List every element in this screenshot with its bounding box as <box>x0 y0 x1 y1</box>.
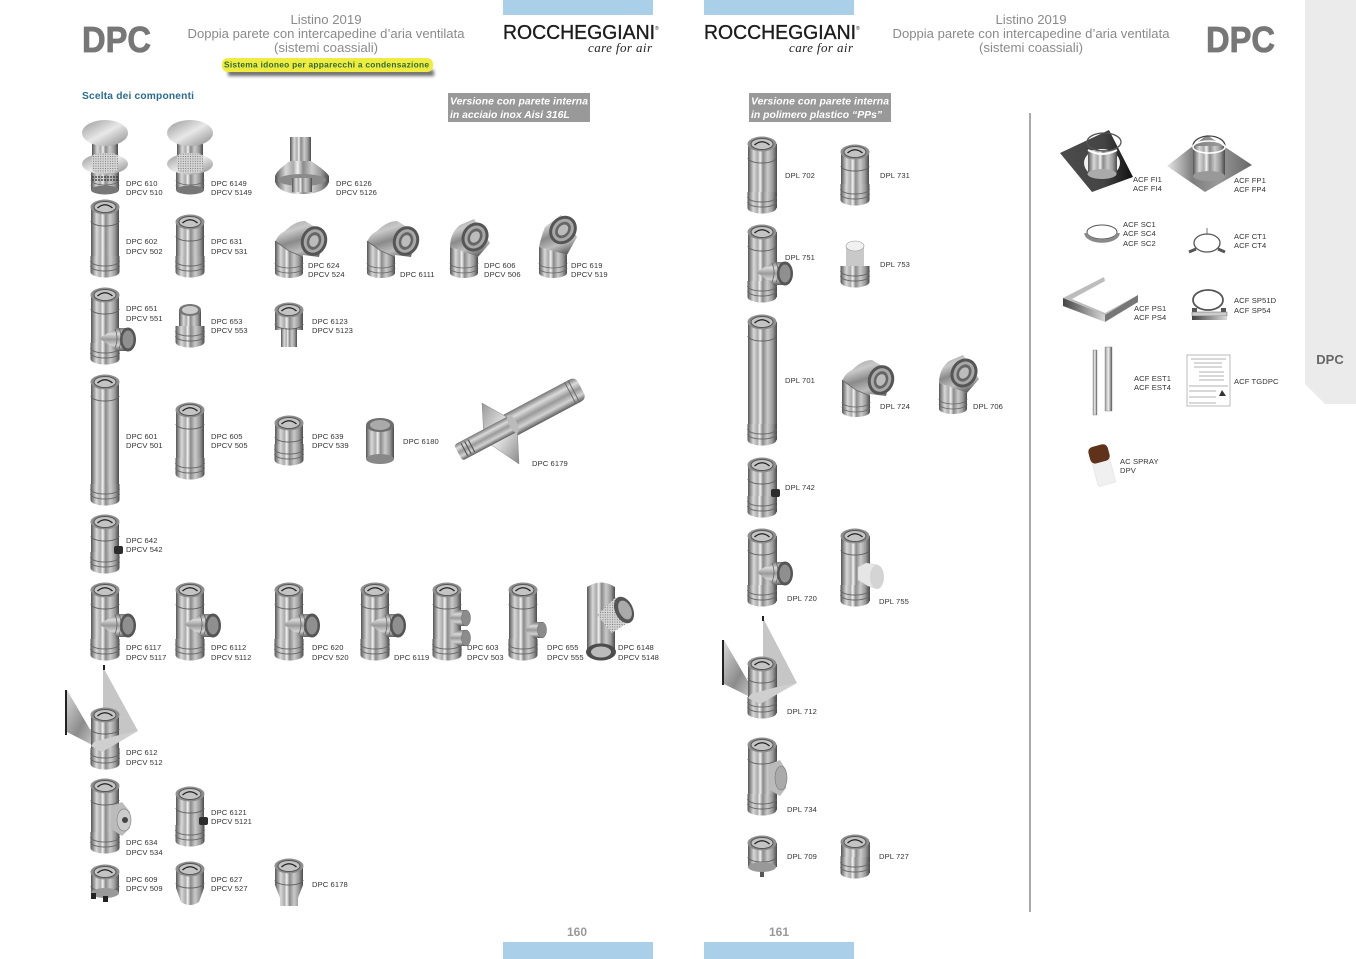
ACF SP: ACF SP51D <box>1234 296 1277 305</box>
bottom blue bar left <box>503 942 653 959</box>
DPC 653 <box>176 304 248 348</box>
DPC 651: DPCV 551 <box>126 314 163 323</box>
DPC 620 <box>274 582 349 662</box>
DPL 706: DPL 706 <box>973 402 1003 411</box>
DPC 6117: DPCV 5117 <box>126 653 166 662</box>
ACF SC: ACF SC4 <box>1123 229 1156 238</box>
AC SPRAY <box>1087 443 1159 487</box>
ACF EST: ACF EST4 <box>1134 383 1171 392</box>
condensing badge: Sistema idoneo per apparecchi a condensazione <box>224 60 429 70</box>
bottom blue bar right <box>704 942 854 959</box>
DPL 731 <box>840 144 910 206</box>
DPC 6126: DPCV 5126 <box>336 188 377 197</box>
DPC 605 <box>176 402 248 480</box>
DPL 753 <box>840 241 910 288</box>
DPC 602: DPCV 502 <box>126 247 163 256</box>
DPC 6121 <box>176 786 252 846</box>
DPC 6123 <box>274 302 353 347</box>
ACF TGDPC <box>1187 355 1279 406</box>
ACF TGDPC: ACF TGDPC <box>1234 377 1279 386</box>
DPC 6119 <box>360 582 429 662</box>
DPL 742 <box>748 458 815 518</box>
DPC 6119: DPC 6119 <box>394 653 429 662</box>
DPC 653: DPCV 553 <box>211 326 248 335</box>
side tab label: DPC <box>1316 352 1344 367</box>
DPC 6178: DPC 6178 <box>312 880 348 889</box>
DPC 6149: DPC 6149 <box>211 179 247 188</box>
DPL 751: DPL 751 <box>785 253 815 262</box>
ACF FI: ACF FI4 <box>1133 184 1162 193</box>
DPL 724 <box>842 360 910 417</box>
DPC 631 <box>176 214 248 278</box>
DPC 6179: DPC 6179 <box>532 459 568 468</box>
DPC 620: DPC 620 <box>312 643 344 652</box>
header title left: Doppia parete con intercapedine d’aria ventilata <box>188 26 465 41</box>
logo right: ® <box>856 25 860 32</box>
DPC 634 <box>90 778 163 857</box>
DPC 606: DPC 606 <box>484 261 516 270</box>
ACF CT: ACF CT1 <box>1234 232 1266 241</box>
DPC 610: DPC 610 <box>126 179 158 188</box>
DPC 603: DPC 603 <box>467 643 499 652</box>
DPC 602 <box>90 200 163 278</box>
DPC 624 <box>275 221 345 279</box>
version box steel: in acciaio inox Aisi 316L <box>450 110 570 121</box>
DPL 706 <box>939 354 1003 414</box>
DPC 612 <box>65 665 163 770</box>
DPC 6112: DPCV 5112 <box>211 653 251 662</box>
header title left: Listino 2019 <box>290 12 362 27</box>
version box steel <box>448 93 590 122</box>
DPC 610 <box>82 120 163 197</box>
DPC 655: DPCV 555 <box>547 653 584 662</box>
ACF FI: ACF FI1 <box>1133 175 1162 184</box>
DPC 6123: DPCV 5123 <box>312 326 353 335</box>
DPL 755: DPL 755 <box>879 597 909 606</box>
DPC 6112: DPC 6112 <box>211 643 246 652</box>
ACF FP: ACF FP1 <box>1234 176 1266 185</box>
page number 161: 161 <box>769 925 789 939</box>
header title right <box>892 12 1170 55</box>
DPC 6126 <box>275 137 377 197</box>
DPC 601 <box>90 374 163 506</box>
DPC 6148: DPCV 5148 <box>618 653 659 662</box>
DPL 701: DPL 701 <box>785 376 815 385</box>
ACF SC <box>1086 220 1156 248</box>
DPC 606: DPCV 506 <box>484 270 521 279</box>
DPL 727: DPL 727 <box>879 852 909 861</box>
DPC 605: DPCV 505 <box>211 441 248 450</box>
DPC 601: DPC 601 <box>126 432 158 441</box>
DPC 601: DPCV 501 <box>126 441 163 450</box>
logo left: ® <box>655 25 659 32</box>
ACF SC: ACF SC2 <box>1123 239 1156 248</box>
side tab <box>1305 0 1356 404</box>
DPC 6179 <box>453 377 587 468</box>
DPL 709: DPL 709 <box>787 852 817 861</box>
DPC 609: DPCV 509 <box>126 884 163 893</box>
DPC 651: DPC 651 <box>126 304 158 313</box>
version box plastic: Versione con parete interna <box>751 96 889 108</box>
DPC 6123: DPC 6123 <box>312 317 348 326</box>
DPC 606 <box>450 218 521 279</box>
ACF SC: ACF SC1 <box>1123 220 1156 229</box>
AC SPRAY: AC SPRAY <box>1120 457 1159 466</box>
DPC 6149 <box>167 120 252 197</box>
section mark right: DPC <box>1206 19 1275 60</box>
DPC 605: DPC 605 <box>211 432 243 441</box>
DPL 712: DPL 712 <box>787 707 817 716</box>
DPL 709 <box>748 836 817 877</box>
DPC 6148 <box>586 582 659 662</box>
top blue bar right <box>704 0 854 15</box>
DPC 634: DPCV 534 <box>126 848 163 857</box>
section heading: Scelta dei componenti <box>82 91 194 102</box>
condensing badge <box>222 58 434 76</box>
logo left <box>503 22 659 55</box>
DPC 642: DPC 642 <box>126 536 158 545</box>
DPC 6121: DPCV 5121 <box>211 817 252 826</box>
DPL 724: DPL 724 <box>880 402 910 411</box>
DPC 610: DPCV 510 <box>126 188 163 197</box>
DPC 6148: DPC 6148 <box>618 643 654 652</box>
AC SPRAY: DPV <box>1120 466 1137 475</box>
DPC 631: DPCV 531 <box>211 247 248 256</box>
DPC 624: DPCV 524 <box>308 270 345 279</box>
logo left: care for air <box>588 40 653 55</box>
DPC 603: DPCV 503 <box>467 653 504 662</box>
DPC 639: DPCV 539 <box>312 441 349 450</box>
DPC 651 <box>90 288 163 364</box>
DPC 6117 <box>90 582 166 662</box>
separator <box>1029 113 1031 912</box>
DPC 627: DPCV 527 <box>211 884 248 893</box>
DPC 655: DPC 655 <box>547 643 579 652</box>
DPL 734: DPL 734 <box>787 805 817 814</box>
DPC 602: DPC 602 <box>126 237 158 246</box>
header title left: (sistemi coassiali) <box>274 40 378 55</box>
ACF EST: ACF EST1 <box>1134 374 1171 383</box>
logo right <box>704 22 860 55</box>
DPC 639: DPC 639 <box>312 432 344 441</box>
version box steel: Versione con parete interna <box>450 96 588 108</box>
ACF SP <box>1192 290 1277 320</box>
DPC 609 <box>90 864 163 902</box>
header title right: Listino 2019 <box>995 12 1067 27</box>
DPC 642 <box>90 514 163 574</box>
DPC 6117: DPC 6117 <box>126 643 161 652</box>
ACF EST <box>1093 347 1171 415</box>
DPL 731: DPL 731 <box>880 171 910 180</box>
DPC 6126: DPC 6126 <box>336 179 372 188</box>
DPL 734 <box>748 738 817 816</box>
DPL 751 <box>748 224 815 302</box>
ACF CT <box>1189 228 1266 252</box>
DPC 631: DPC 631 <box>211 237 243 246</box>
DPC 653: DPC 653 <box>211 317 243 326</box>
version box plastic: in polimero plastico “PPs” <box>751 110 883 121</box>
header title right: (sistemi coassiali) <box>979 40 1083 55</box>
DPL 755 <box>840 528 909 606</box>
DPL 712 <box>722 616 817 718</box>
DPC 6180 <box>366 418 439 464</box>
logo left: ROCCHEGGIANI <box>503 22 655 44</box>
DPC 639 <box>274 416 349 466</box>
DPL 701 <box>748 314 815 446</box>
logo right: ROCCHEGGIANI <box>704 22 856 44</box>
ACF PS: ACF PS4 <box>1134 313 1166 322</box>
DPC 620: DPCV 520 <box>312 653 349 662</box>
DPC 6111 <box>367 221 435 279</box>
DPL 742: DPL 742 <box>785 483 815 492</box>
DPC 655 <box>508 582 584 662</box>
DPC 6149: DPCV 5149 <box>211 188 252 197</box>
DPC 619: DPC 619 <box>571 261 603 270</box>
DPL 702 <box>748 136 815 214</box>
ACF FP <box>1167 135 1266 194</box>
ACF PS <box>1063 277 1166 322</box>
header title left <box>188 12 465 55</box>
DPC 619 <box>539 210 608 279</box>
ACF SP: ACF SP54 <box>1234 306 1271 315</box>
ACF FP: ACF FP4 <box>1234 185 1266 194</box>
DPC 609: DPC 609 <box>126 875 158 884</box>
header title right: Doppia parete con intercapedine d’aria ventilata <box>892 26 1170 41</box>
DPC 6121: DPC 6121 <box>211 808 247 817</box>
DPC 634: DPC 634 <box>126 838 158 847</box>
DPC 603 <box>432 582 504 662</box>
page number 160: 160 <box>567 925 587 939</box>
DPC 6112 <box>176 582 251 662</box>
DPC 627: DPC 627 <box>211 875 243 884</box>
section mark left: DPC <box>82 19 151 60</box>
DPL 727 <box>840 834 909 878</box>
DPL 720 <box>748 528 817 606</box>
DPC 612: DPCV 512 <box>126 758 163 767</box>
DPL 753: DPL 753 <box>880 260 910 269</box>
DPC 642: DPCV 542 <box>126 545 163 554</box>
DPC 6180: DPC 6180 <box>403 437 439 446</box>
DPC 619: DPCV 519 <box>571 270 608 279</box>
DPC 624: DPC 624 <box>308 261 340 270</box>
DPC 627 <box>176 862 248 905</box>
DPC 612: DPC 612 <box>126 748 158 757</box>
ACF PS: ACF PS1 <box>1134 304 1166 313</box>
ACF FI <box>1060 130 1162 193</box>
top blue bar left <box>503 0 653 15</box>
DPL 702: DPL 702 <box>785 171 815 180</box>
version box plastic <box>749 93 891 122</box>
DPC 6111: DPC 6111 <box>400 270 435 279</box>
logo right: care for air <box>789 40 854 55</box>
DPC 6178 <box>274 858 348 906</box>
DPL 720: DPL 720 <box>787 594 817 603</box>
ACF CT: ACF CT4 <box>1234 241 1266 250</box>
